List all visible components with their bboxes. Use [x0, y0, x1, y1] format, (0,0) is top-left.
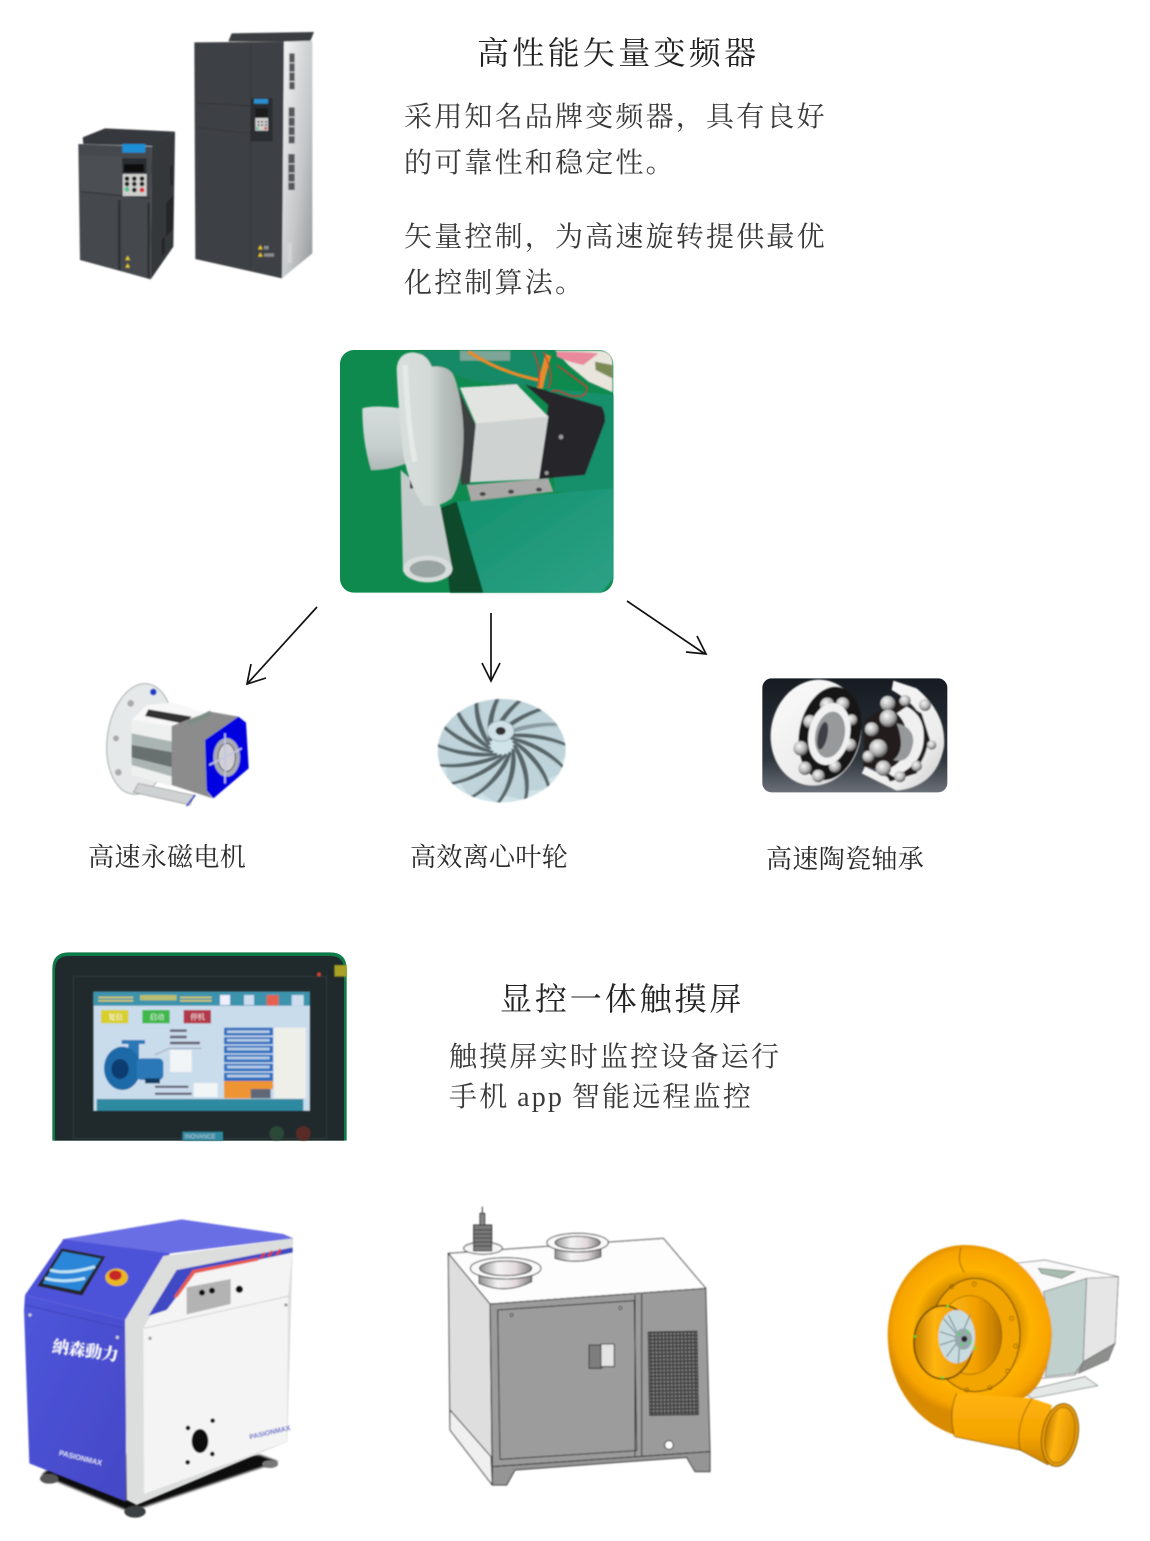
image: centrifugal impeller — [437, 698, 566, 804]
volute casing — [888, 1245, 1052, 1435]
silver frame — [125, 1238, 293, 1505]
image: blue and white blower unit: PASIONMAX — [249, 1425, 291, 1441]
text: touch screen features — [449, 1041, 781, 1113]
aluminium motor body — [460, 384, 548, 482]
large inverter cabinet — [194, 32, 314, 278]
image: touch screen photo: INOVANCE — [185, 1135, 215, 1141]
motor housing — [1015, 1260, 1118, 1398]
image: touch screen photo: 复位 — [108, 1013, 124, 1022]
heading: high performance vector inverter: 高性能矢量变频器 — [477, 35, 759, 71]
image: blue and white blower unit: 納森動力 — [51, 1336, 120, 1365]
label: high speed ceramic bearing: 高速陶瓷轴承 — [766, 845, 924, 874]
arrow: to bearing — [627, 601, 706, 654]
image: cabinet CAD drawing — [448, 1207, 710, 1485]
image: blue and white blower unit: PASIONMAX — [58, 1448, 103, 1468]
text: touch screen features: 手机 app 智能远程监控 — [449, 1081, 753, 1113]
heading: integrated touch screen: 显控一体触摸屏 — [500, 981, 744, 1017]
outlet pipe — [401, 470, 452, 572]
image: touch screen photo: 停机 — [190, 1013, 206, 1022]
image: blue and white blower unit — [24, 1219, 293, 1518]
image: touch screen photo — [52, 952, 347, 1141]
image: ceramic bearings — [761, 671, 947, 794]
image: orange volute blower CAD — [888, 1245, 1118, 1469]
image: permanent magnet motor — [100, 679, 249, 806]
text: reliable inverter brand: 采用知名品牌变频器，具有良好 — [404, 101, 827, 133]
text: reliable inverter brand: 的可靠性和稳定性。 — [404, 147, 676, 179]
text: vector control: 矢量控制，为高速旋转提供最优 — [404, 221, 827, 253]
text: touch screen features: 触摸屏实时监控设备运行 — [449, 1041, 781, 1073]
small inverter cabinet — [78, 128, 175, 279]
blue and red stripe — [148, 1247, 293, 1316]
text: vector control — [404, 221, 827, 299]
top flange right — [547, 1233, 608, 1261]
black controller box — [525, 384, 605, 479]
arrow: to impeller — [482, 613, 500, 681]
inlet and impeller — [930, 1278, 1020, 1392]
inlet pipe — [362, 406, 409, 470]
image: blower photo — [340, 350, 613, 593]
outlet pipe — [952, 1393, 1052, 1465]
touch panel and e-stop — [37, 1248, 105, 1296]
arrow: to motor — [247, 607, 317, 684]
image: touch screen photo: 启动 — [150, 1013, 165, 1022]
label: high speed permanent magnet motor: 高速永磁电机 — [88, 843, 246, 872]
text: reliable inverter brand — [404, 101, 827, 179]
left bearing — [761, 671, 871, 794]
sensor post — [464, 1207, 502, 1254]
right bearing cut open — [862, 681, 944, 791]
floor shadow — [42, 1453, 278, 1512]
image: two inverter cabinets — [78, 32, 314, 279]
text: vector control: 化控制算法。 — [404, 267, 585, 299]
orange and red cables — [468, 352, 587, 396]
side opening — [187, 1279, 231, 1314]
top flange left — [470, 1258, 541, 1289]
volute — [397, 352, 464, 506]
label: high efficiency centrifugal impeller: 高效离心叶轮 — [410, 843, 568, 872]
